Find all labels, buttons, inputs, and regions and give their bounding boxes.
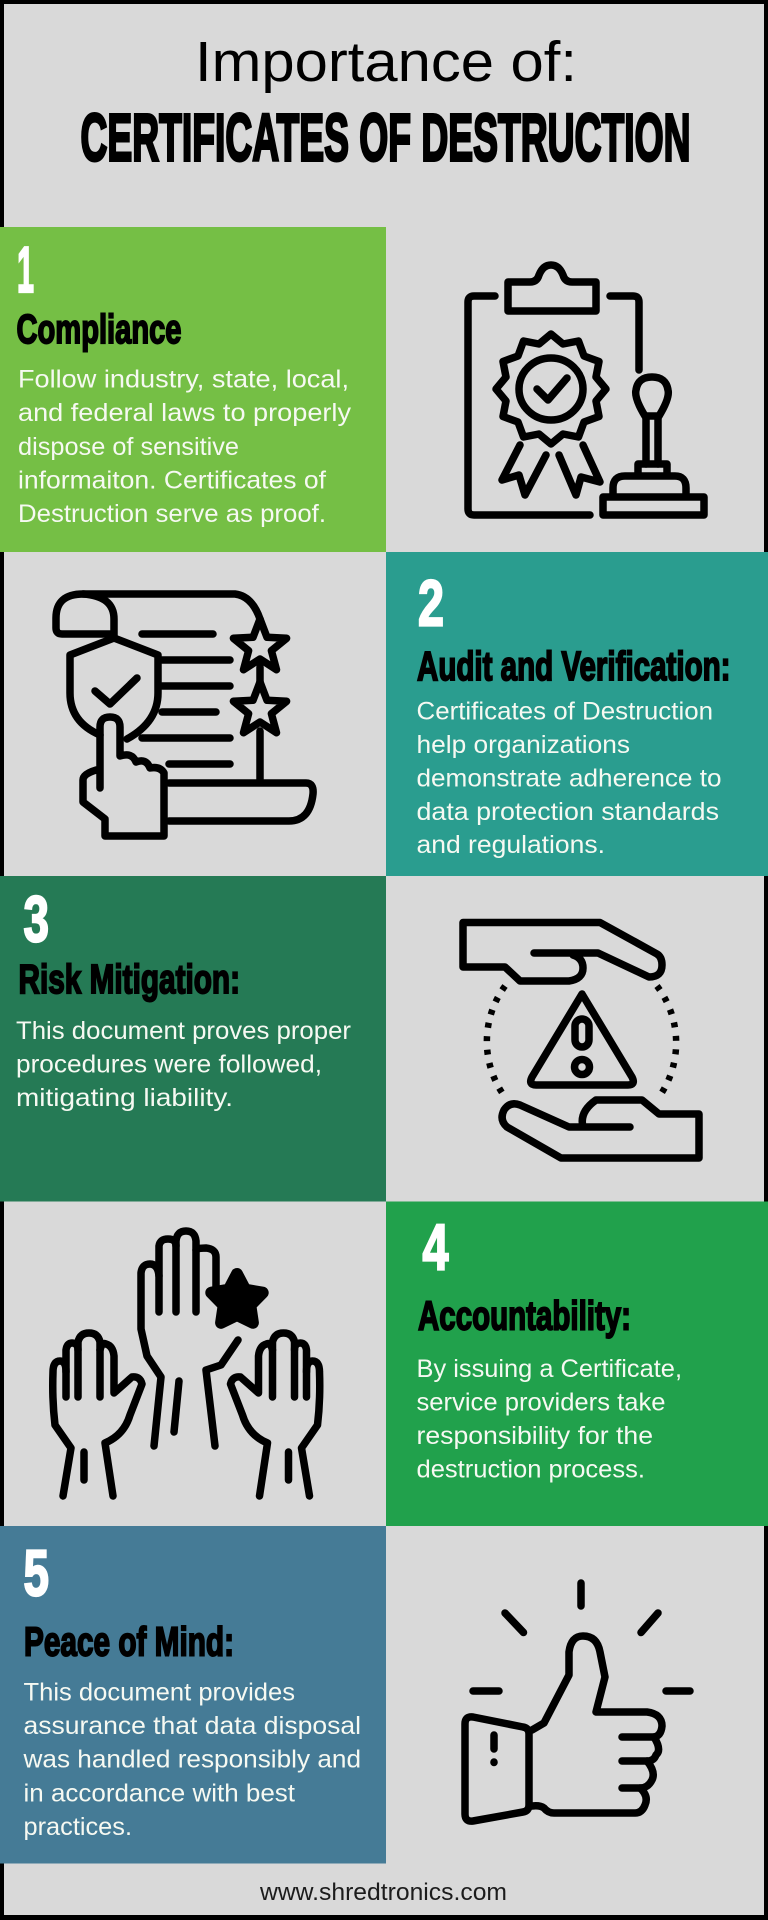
panel: risk mitigation: mitigating liability. <box>16 1084 233 1112</box>
panel: accountability: service providers take <box>416 1388 666 1416</box>
panel: audit and verification: data protection standards <box>416 798 719 826</box>
panel: risk mitigation: Risk Mitigation: <box>18 956 240 1002</box>
panel: audit and verification: demonstrate adherence to <box>416 764 722 792</box>
panel: compliance: Compliance <box>16 306 182 352</box>
panel: audit and verification <box>386 552 768 876</box>
icon: scroll with shield, stars and hand <box>56 594 313 836</box>
panel: risk mitigation <box>0 876 386 1202</box>
panel: accountability: destruction process. <box>416 1456 645 1484</box>
panel: compliance: and federal laws to properly <box>18 399 352 427</box>
icon: clipboard with seal and stamp <box>468 265 704 515</box>
panel: audit and verification: Certificates of Destruction <box>416 698 713 726</box>
panel: compliance <box>0 227 386 552</box>
panel: compliance: Destruction serve as proof. <box>18 500 326 528</box>
panel: audit and verification: help organizations <box>416 731 630 759</box>
panel: compliance: dispose of sensitive <box>18 433 239 461</box>
panel: risk mitigation: 3 <box>24 882 49 956</box>
icon: thumbs up with rays <box>465 1583 690 1821</box>
panel: risk mitigation: This document proves proper <box>16 1017 351 1045</box>
panel: accountability: Accountability: <box>418 1292 631 1338</box>
panel: audit and verification: 2 <box>418 566 444 640</box>
panel: compliance: Follow industry, state, local, <box>18 366 349 394</box>
panel: compliance: 1 <box>17 233 34 306</box>
panel: peace of mind: assurance that data disposal <box>24 1712 361 1740</box>
panel: accountability: By issuing a Certificate, <box>416 1355 682 1383</box>
panel: peace of mind: 5 <box>24 1536 49 1610</box>
panel: audit and verification: and regulations. <box>416 831 605 859</box>
title <box>80 30 690 176</box>
footer website: www.shredtronics.com <box>259 1879 507 1906</box>
panel: peace of mind: practices. <box>24 1813 132 1841</box>
panel: accountability <box>386 1202 768 1526</box>
icon: hands protecting warning sign <box>463 922 699 1158</box>
panel: peace of mind: Peace of Mind: <box>24 1618 234 1664</box>
panel: peace of mind <box>0 1526 386 1864</box>
panel: compliance: informaiton. Certificates of <box>18 466 326 494</box>
panel: accountability: 4 <box>422 1210 448 1284</box>
title: Importance of: <box>195 30 577 94</box>
panel: peace of mind: in accordance with best <box>24 1780 295 1808</box>
panel: peace of mind: This document provides <box>24 1678 295 1706</box>
panel: peace of mind: was handled responsibly and <box>22 1746 361 1774</box>
panel: accountability: responsibility for the <box>416 1422 653 1450</box>
icon: raised hands with star <box>53 1231 320 1496</box>
panel: risk mitigation: procedures were followed, <box>16 1050 322 1078</box>
